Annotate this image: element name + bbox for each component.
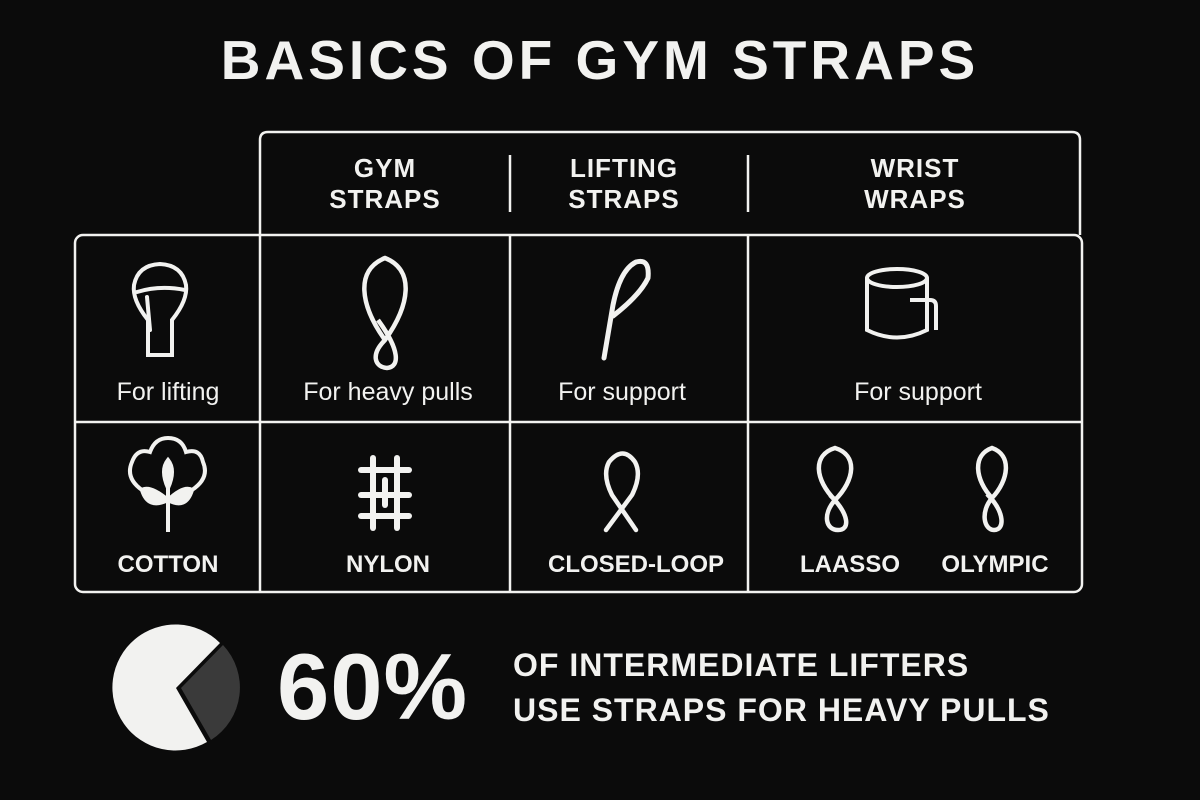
stat description: OF INTERMEDIATE LIFTERS	[513, 647, 969, 683]
row1 labels: For heavy pulls	[303, 378, 473, 406]
icon: lasso	[819, 448, 851, 530]
icon: cotton	[130, 438, 205, 532]
row1 labels: For lifting	[117, 378, 219, 406]
stat: 60%: 60%	[277, 634, 468, 739]
stat description	[513, 647, 1050, 728]
row1 labels: For support	[558, 378, 686, 406]
header box: WRIST	[871, 153, 959, 183]
title: BASICS OF GYM STRAPS	[221, 29, 979, 91]
icon: nylon grid	[361, 458, 409, 528]
row2 labels	[118, 551, 1049, 578]
icon: figure eight	[364, 258, 406, 368]
stat description: USE STRAPS FOR HEAVY PULLS	[513, 692, 1050, 728]
row1 labels: For support	[854, 378, 982, 406]
row2 labels: NYLON	[346, 551, 430, 578]
header box: WRAPS	[864, 184, 966, 214]
header box: STRAPS	[568, 184, 680, 214]
grid	[75, 235, 1082, 592]
icon: closed loop	[606, 454, 638, 530]
icon: lifting strap loop	[604, 261, 648, 358]
row2 labels: LAASSO	[800, 551, 900, 578]
pie chart	[112, 624, 240, 750]
header box: LIFTING	[570, 153, 678, 183]
row1 labels	[117, 378, 982, 406]
icon: wrist wrap	[867, 269, 936, 338]
header box: STRAPS	[329, 184, 441, 214]
icon: olympic	[978, 448, 1006, 530]
row2 labels: OLYMPIC	[941, 551, 1049, 578]
header box	[260, 132, 1080, 235]
header box: GYM	[354, 153, 416, 183]
row2 labels: COTTON	[118, 551, 218, 578]
row2 labels: CLOSED-LOOP	[548, 551, 724, 578]
icon: cup/helmet	[134, 264, 186, 355]
